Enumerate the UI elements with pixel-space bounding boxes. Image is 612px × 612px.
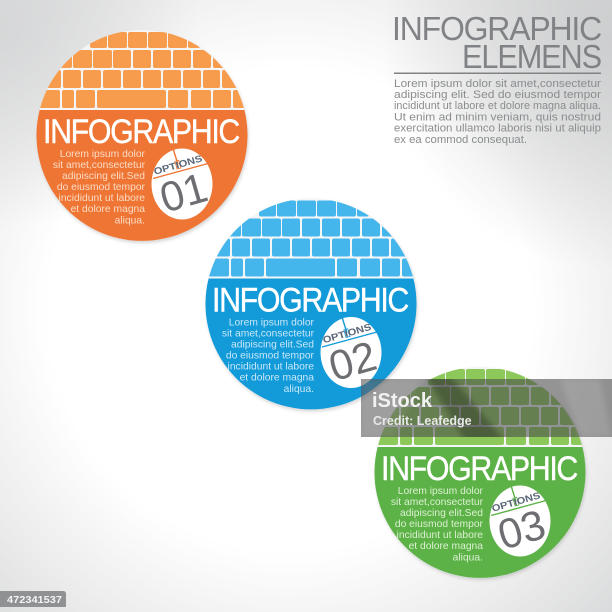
- color band: [374, 447, 586, 578]
- heading: INFOGRAPHIC: [392, 10, 601, 47]
- intro text block: incididunt ut labore et dolore magna aliqua.: [394, 100, 601, 112]
- bricks: [205, 200, 416, 276]
- band text: sit amet,consectetur: [53, 160, 146, 171]
- band text: adipiscing elit.Sed: [62, 171, 145, 182]
- band text: aliqua.: [115, 215, 145, 226]
- heading: ELEMENS: [462, 38, 601, 75]
- bricks: [36, 32, 247, 108]
- option badge: 01: [155, 163, 213, 221]
- panel: green option 03: [374, 367, 586, 580]
- intro text block: adipiscing elit. Sed do eiusmod tempor: [394, 89, 601, 101]
- band title: INFOGRAPHIC: [43, 113, 240, 151]
- band text: Lorem ipsum dolor: [398, 486, 484, 497]
- intro text block: ex ea commod consequat.: [394, 134, 527, 146]
- image id tag: [0, 591, 66, 607]
- band text: adipiscing elit.Sed: [400, 508, 483, 519]
- band text: sit amet,consectetur: [222, 328, 315, 340]
- band text: [222, 318, 315, 395]
- band text: et dolore magna: [409, 541, 483, 552]
- option badge: OPTIONS: [153, 153, 204, 178]
- heading: [392, 10, 601, 75]
- band text: incididunt ut labore: [228, 362, 314, 372]
- bricks: [374, 369, 585, 445]
- intro text block: Ut enim ad minim veniam, quis nostrud: [394, 112, 601, 124]
- panel: orange option 01: [36, 30, 248, 243]
- intro text block: Lorem ipsum dolor sit amet,consectetur: [394, 78, 601, 90]
- band text: incididunt ut labore: [59, 193, 145, 204]
- color band: [205, 278, 416, 409]
- watermark credit: Credit: Leafedge: [373, 414, 472, 428]
- watermark band: [361, 379, 612, 437]
- option badge: 02: [324, 332, 382, 390]
- band text: Lorem ipsum dolor: [229, 318, 315, 328]
- band text: do eiusmod tempor: [395, 519, 484, 530]
- image id tag: 472341537: [7, 595, 62, 606]
- option badge: 03: [493, 500, 551, 558]
- band text: [53, 149, 146, 226]
- band text: do eiusmod tempor: [57, 182, 146, 193]
- band text: adipiscing elit.Sed: [231, 340, 314, 350]
- option badge: OPTIONS: [491, 490, 542, 515]
- band text: [391, 486, 484, 563]
- intro text block: [394, 78, 601, 146]
- band text: Lorem ipsum dolor: [60, 149, 146, 160]
- panel: blue option 02: [205, 198, 418, 412]
- band text: et dolore magna: [240, 372, 314, 384]
- band text: aliqua.: [453, 552, 483, 563]
- band title: INFOGRAPHIC: [212, 282, 409, 320]
- option badge: OPTIONS: [322, 322, 373, 346]
- watermark logo: iStock: [372, 390, 433, 412]
- band text: incididunt ut labore: [397, 530, 483, 541]
- band text: sit amet,consectetur: [391, 497, 484, 508]
- band text: aliqua.: [284, 384, 314, 395]
- band title: INFOGRAPHIC: [381, 450, 578, 488]
- band text: do eiusmod tempor: [226, 350, 315, 362]
- band text: et dolore magna: [71, 204, 145, 215]
- color band: [36, 110, 248, 241]
- intro text block: exercitation ullamco laboris nisi ut aliquip: [394, 122, 601, 134]
